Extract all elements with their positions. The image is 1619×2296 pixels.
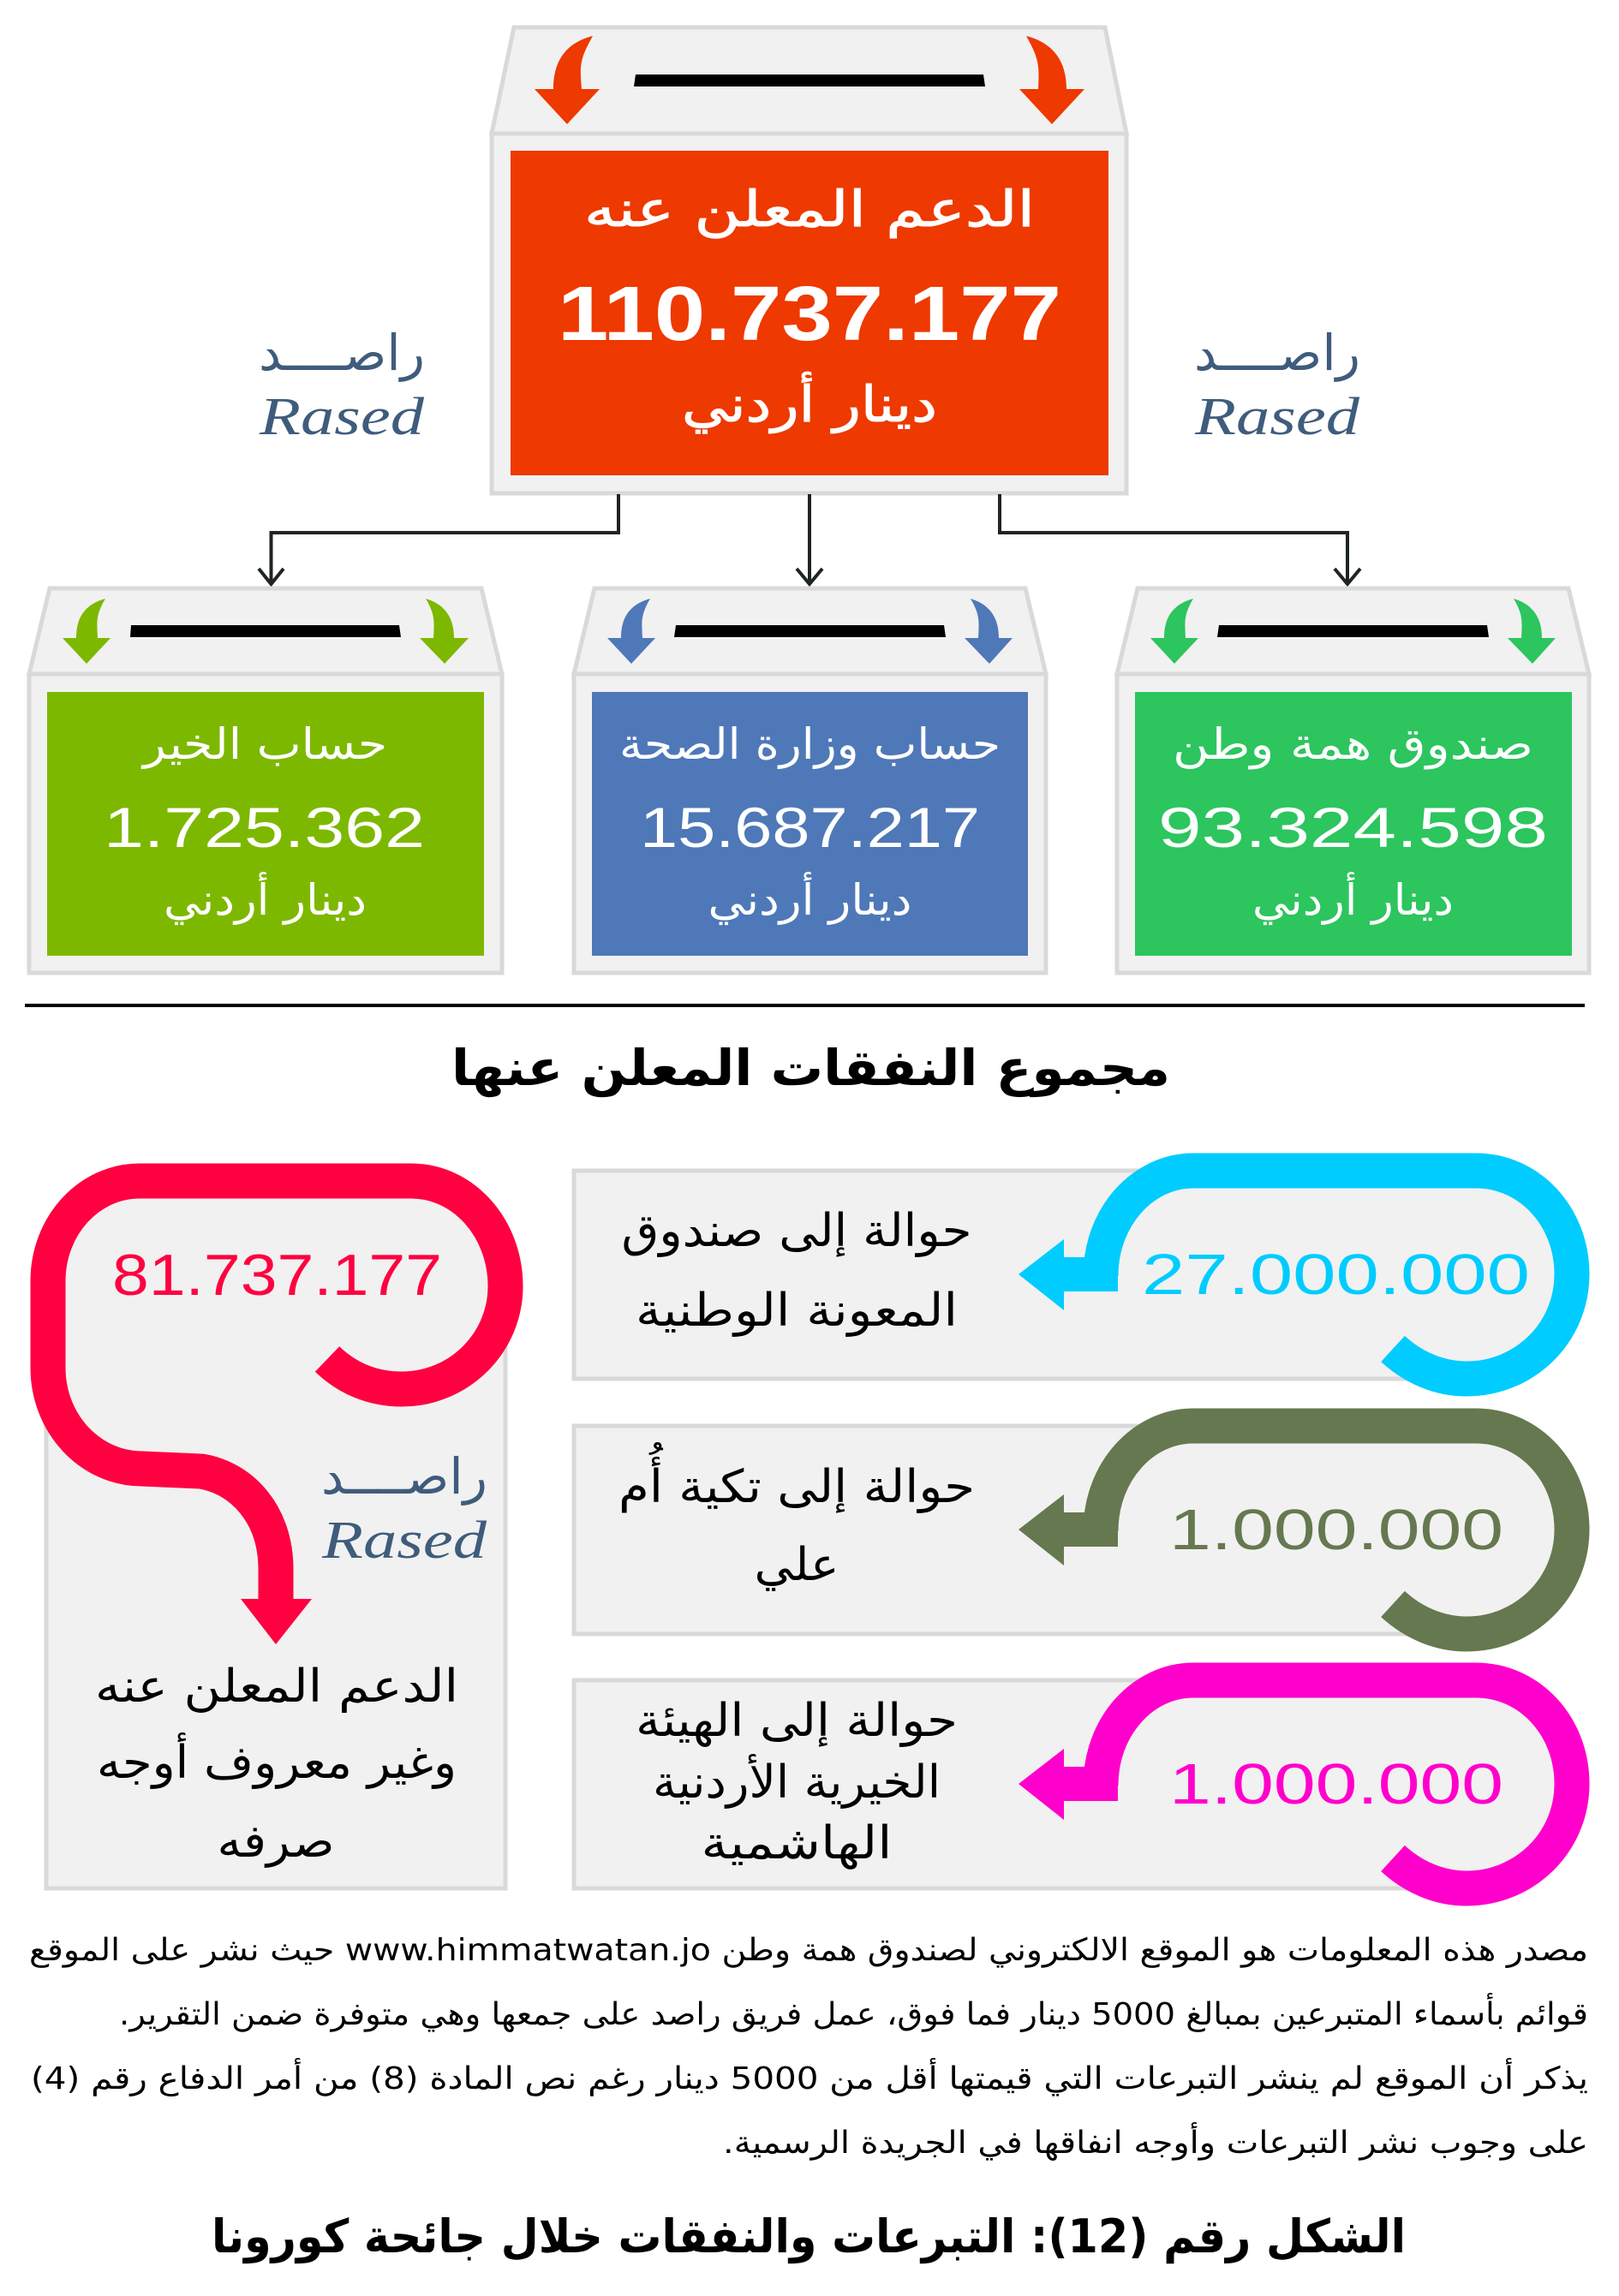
arrow: connector to centre box: [797, 494, 822, 584]
icon: right arrow: [420, 599, 469, 664]
description: [95, 1661, 458, 1868]
value: 27.000.000: [1142, 1243, 1530, 1307]
arrow: connector to left box: [259, 494, 618, 584]
currency: دينار أردني: [1252, 872, 1454, 925]
box body: [29, 674, 502, 973]
label: الهاشمية: [701, 1817, 893, 1870]
coloured card: [511, 151, 1108, 475]
text block: source note: يذكر أن الموقع لم ينشر التبرعات التي قيمتها أقل من 5000 دينار رغم نص المادة (8) من أمر الدفاع رقم (4): [31, 2058, 1588, 2096]
ballot slot: [1217, 625, 1489, 637]
arrow: magenta looping arrow: [1019, 1680, 1572, 1888]
ballot slot: [674, 625, 946, 637]
box body: [1117, 674, 1589, 973]
account name: حساب وزارة الصحة: [619, 719, 1001, 770]
value: 1.000.000: [1169, 1752, 1503, 1816]
total value: 110.737.177: [558, 271, 1061, 357]
coloured card: [592, 692, 1028, 956]
icon: left arrow: [63, 599, 111, 664]
panel background: [574, 1680, 1572, 1888]
box lid: [574, 588, 1046, 674]
label: [622, 1205, 971, 1337]
currency: دينار أردني: [708, 872, 911, 925]
icon: right arrow: [1508, 599, 1556, 664]
box lid: [1117, 588, 1589, 674]
description: الدعم المعلن عنه: [95, 1661, 458, 1713]
arrow: cyan looping arrow: [1019, 1171, 1572, 1379]
arrow: connector to right box: [1000, 494, 1360, 584]
value: 1.000.000: [1169, 1498, 1503, 1562]
arrow: red looping arrow: [48, 1181, 505, 1644]
panel: Himmat Watan fund box: [1117, 588, 1589, 973]
coloured card: [1135, 692, 1572, 956]
label: المعونة الوطنية: [636, 1285, 958, 1337]
logo: Rased top right: [1194, 324, 1360, 446]
logo: Rased top left: راصــــد: [259, 324, 425, 382]
box lid: [492, 27, 1126, 134]
logo: Rased top right: Rased: [1194, 388, 1360, 446]
text block: source note: قوائم بأسماء المتبرعين بمبالغ 5000 دينار فما فوق، عمل فريق راصد على جمعها وهي متوفرة ضمن التقرير.: [119, 1993, 1588, 2032]
description: صرفه: [218, 1816, 334, 1868]
panel background: [574, 1171, 1572, 1379]
text block: source note: [29, 1933, 1588, 2161]
currency: دينار أردني: [164, 872, 367, 925]
box lid: [29, 588, 502, 674]
label: [636, 1695, 958, 1870]
icon: left arrow: [607, 599, 655, 664]
icon: left arrow: [535, 36, 600, 124]
arrow: olive looping arrow: [1019, 1426, 1572, 1634]
icon: right arrow: [1019, 36, 1084, 124]
panel: unknown spending: [46, 1181, 505, 1888]
currency: دينار أردني: [682, 372, 937, 434]
label: حوالة إلى الهيئة: [636, 1695, 958, 1747]
heading: total announced expenses: مجموع النفقات المعلن عنها: [451, 1039, 1170, 1098]
panel: Al-Khair account box: [29, 588, 502, 973]
panel: total announced support ballot box: [492, 27, 1126, 493]
panel: Ministry of Health account box: [574, 588, 1046, 973]
logo: Rased top left: Rased: [259, 388, 425, 446]
text block: source note: مصدر هذه المعلومات هو الموقع الالكتروني لصندوق همة وطن www.himmatwatan.jo حيث نشر على الموقع: [29, 1933, 1588, 1968]
account name: حساب الخير: [140, 719, 387, 769]
icon: left arrow: [1150, 599, 1198, 664]
description: وغير معروف أوجه: [97, 1732, 457, 1789]
ballot slot: [130, 625, 401, 637]
fund name: صندوق همة وطن: [1173, 719, 1533, 770]
ballot slot: [634, 75, 985, 86]
panel: transfer to Hashemite charity: [574, 1680, 1572, 1888]
logo: Rased top right: راصــــد: [1194, 324, 1360, 382]
label: حوالة إلى صندوق: [622, 1205, 971, 1257]
label: [618, 1443, 975, 1591]
label: حوالة إلى تكية أُم: [618, 1443, 975, 1513]
logo: Rased: راصــــد: [321, 1447, 487, 1506]
text block: source note: على وجوب نشر التبرعات وأوجه انفاقها في الجريدة الرسمية.: [723, 2122, 1588, 2161]
value: 93.324.598: [1158, 796, 1548, 859]
coloured card: [47, 692, 484, 956]
value: 1.725.362: [104, 796, 425, 859]
value: 81.737.177: [112, 1243, 442, 1308]
icon: right arrow: [965, 599, 1013, 664]
panel: transfer to Um Ali charity: [574, 1426, 1572, 1634]
figure caption: الشكل رقم (12): التبرعات والنفقات خلال جائحة كورونا: [212, 2210, 1406, 2263]
label: الخيرية الأردنية: [653, 1754, 941, 1809]
heading: الدعم المعلن عنه: [584, 180, 1035, 239]
panel background: [574, 1426, 1572, 1634]
logo: Rased top left: [259, 324, 425, 446]
box body: [574, 674, 1046, 973]
box body: [492, 134, 1126, 493]
value: 15.687.217: [640, 796, 980, 859]
panel background: [46, 1181, 505, 1888]
logo: Rased: Rased: [321, 1512, 487, 1570]
panel: transfer to national aid fund: [574, 1171, 1572, 1379]
logo: Rased: [321, 1447, 487, 1570]
label: علي: [754, 1539, 839, 1591]
